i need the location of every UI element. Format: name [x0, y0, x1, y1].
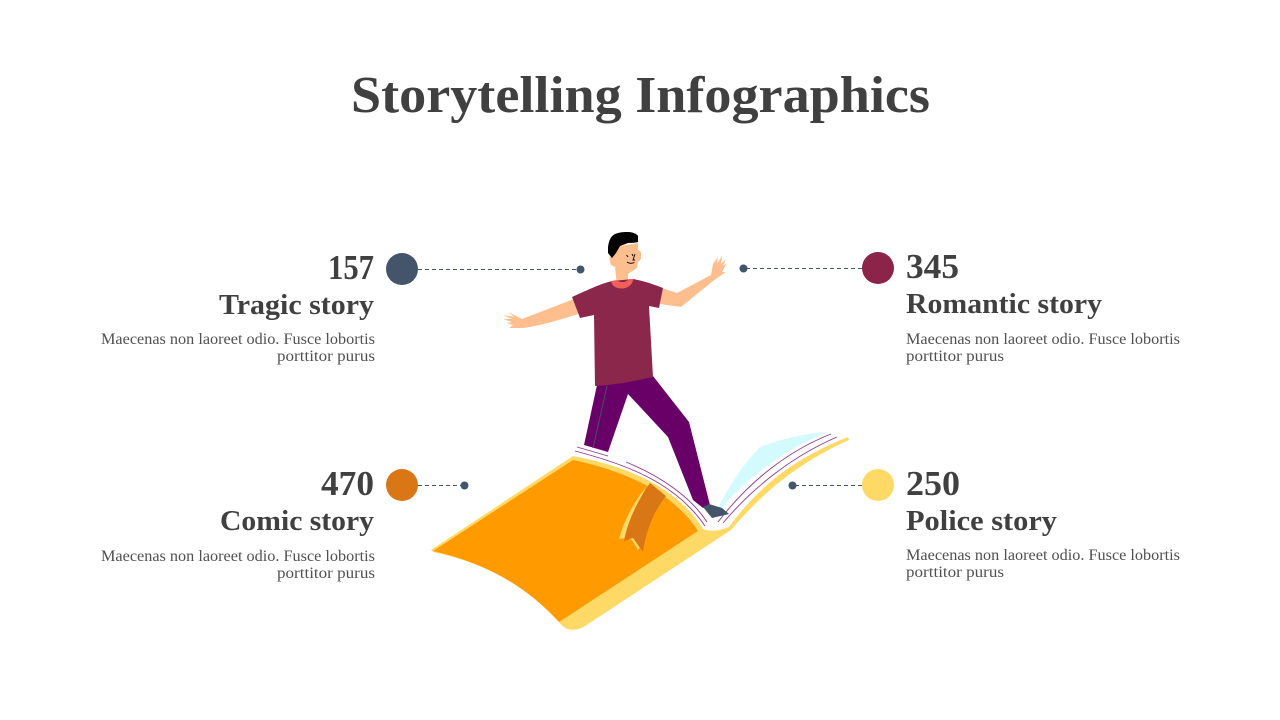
person: hair — [608, 232, 638, 258]
value: 250: 250 — [906, 464, 960, 503]
connector: romantic — [740, 264, 862, 272]
person: legs — [584, 376, 710, 508]
description: police: porttitor purus — [906, 564, 1004, 581]
person: left arm — [503, 299, 578, 328]
person: t-shirt — [572, 279, 663, 386]
book: yellow cover and spine — [431, 437, 849, 630]
description: romantic: porttitor purus — [906, 348, 1004, 365]
marker: comic — [386, 469, 418, 501]
description: police — [906, 547, 1180, 581]
book: light blue lifted page — [718, 432, 827, 512]
description: comic: porttitor purus — [277, 565, 375, 582]
book: white page block — [573, 436, 838, 531]
description: comic — [101, 548, 375, 582]
book: purple page lines — [575, 434, 837, 526]
person: collar — [611, 279, 633, 288]
value: 157: 157 — [328, 248, 374, 287]
item: Romantic story — [740, 247, 1180, 365]
description: police: Maecenas non laoreet odio. Fusce lobortis — [906, 547, 1180, 564]
marker: police — [862, 469, 894, 501]
bookmark — [619, 483, 666, 552]
value: 470: 470 — [321, 464, 374, 503]
description: tragic: porttitor purus — [277, 348, 375, 365]
marker: tragic — [386, 253, 418, 285]
connector: tragic — [418, 266, 584, 274]
marker: romantic — [862, 252, 894, 284]
connector: police — [788, 482, 862, 490]
illustration: person on open book — [431, 232, 849, 630]
connector: comic — [418, 482, 468, 490]
item: Tragic story — [101, 248, 584, 365]
book: orange front cover — [433, 460, 698, 622]
description: romantic — [906, 331, 1180, 365]
description: romantic: Maecenas non laoreet odio. Fusce lobortis — [906, 331, 1180, 348]
person: face details — [626, 254, 635, 263]
heading: Tragic story: Tragic story — [219, 289, 375, 321]
item: Police story — [788, 464, 1180, 581]
heading: Police story: Police story — [906, 505, 1058, 537]
heading: Romantic story: Romantic story — [906, 288, 1103, 320]
description: tragic: Maecenas non laoreet odio. Fusce lobortis — [101, 331, 375, 348]
title: Storytelling Infographics — [351, 67, 930, 124]
description: tragic — [101, 331, 375, 365]
value: 345: 345 — [906, 247, 959, 286]
person: head and neck — [609, 243, 641, 286]
description: comic: Maecenas non laoreet odio. Fusce lobortis — [101, 548, 375, 565]
person: shoe — [703, 504, 729, 518]
person: right arm — [660, 256, 727, 307]
item: Comic story — [101, 464, 468, 582]
heading: Comic story: Comic story — [220, 505, 375, 537]
